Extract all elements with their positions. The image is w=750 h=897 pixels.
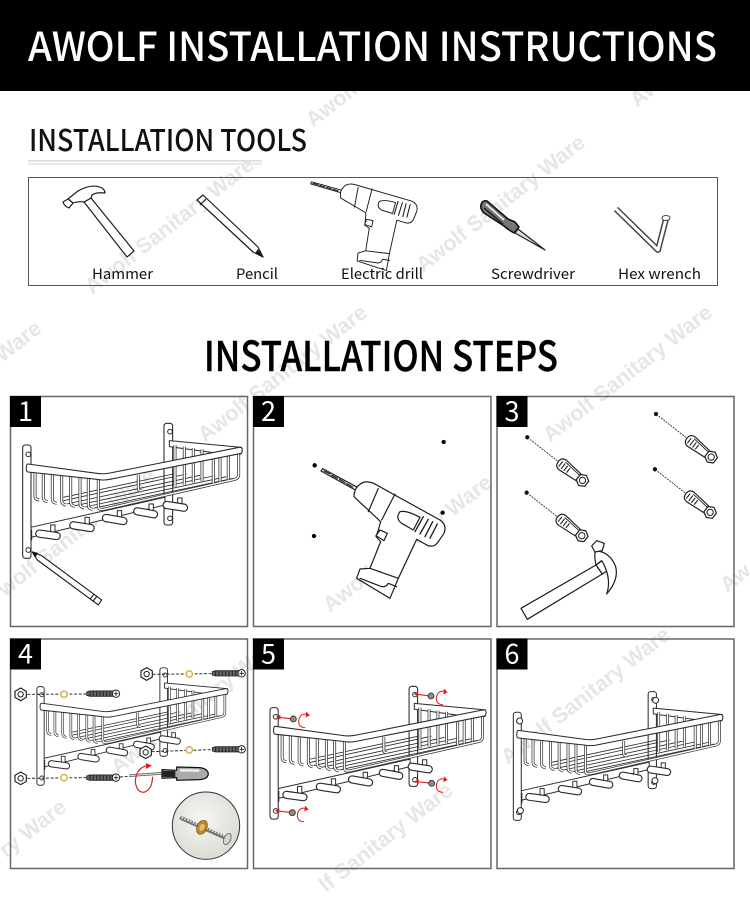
watermarks: Awolf Sanitary Ware xyxy=(80,151,259,299)
step number 4 xyxy=(10,632,41,672)
red tightening arrows and caps xyxy=(275,689,448,822)
watermarks: Awolf Sanitary Ware xyxy=(411,129,590,277)
panel: step 5 xyxy=(253,632,491,868)
panel: step 1 xyxy=(10,390,248,626)
panel: step 4 xyxy=(10,632,248,868)
pencil marking hole xyxy=(32,552,102,605)
wall anchors xyxy=(521,408,719,544)
step number 2 xyxy=(253,390,284,429)
panel: step 6 xyxy=(496,632,734,868)
step number 6: 6 xyxy=(504,632,520,672)
step number 3: 3 xyxy=(504,390,520,429)
mounted screw caps xyxy=(517,697,659,814)
hammer xyxy=(521,541,616,619)
tool: hex wrench xyxy=(616,209,701,284)
drill with marked holes xyxy=(312,440,446,598)
step number 2: 2 xyxy=(261,390,276,429)
tool: screwdriver xyxy=(481,201,575,284)
title banner xyxy=(0,0,750,91)
photo inset: screw with washer xyxy=(172,792,240,859)
watermarks: Awolf Sanitary Ware xyxy=(106,631,285,779)
tool: electric drill: Electric drill xyxy=(341,263,423,284)
step number 4: 4 xyxy=(18,632,33,672)
panel: step 3 xyxy=(496,390,734,626)
installed rack xyxy=(513,692,723,820)
step number 5 xyxy=(253,632,284,672)
panel: installation tools xyxy=(28,160,718,286)
tool: electric drill xyxy=(310,160,429,284)
tool: pencil xyxy=(197,195,278,284)
tool: hammer: Hammer xyxy=(92,263,153,284)
tool: screwdriver: Screwdriver xyxy=(491,263,575,284)
tool: hex wrench: Hex wrench xyxy=(618,263,701,284)
watermarks: Awolf Sanitary Ware xyxy=(496,621,675,769)
basket rack xyxy=(270,686,486,819)
watermarks: Awolf Sanitary Ware xyxy=(538,299,717,447)
basket rack xyxy=(23,423,242,558)
step number 1: 1 xyxy=(18,390,33,429)
step number 3 xyxy=(496,390,528,429)
title banner: AWOLF INSTALLATION INSTRUCTIONS xyxy=(28,15,717,73)
tool: pencil: Pencil xyxy=(236,263,278,284)
step number 1 xyxy=(10,390,41,429)
basket rack xyxy=(37,668,228,785)
heading: installation tools: INSTALLATION TOOLS xyxy=(29,116,307,160)
watermarks: lf Sanitary Ware xyxy=(314,777,457,897)
screws, washers and nuts xyxy=(15,668,245,785)
watermarks: Awolf Sanitary Ware xyxy=(318,469,497,617)
step number 5: 5 xyxy=(261,632,276,672)
screwdriver with rotation arrow xyxy=(129,763,208,792)
panel: step 2 xyxy=(253,390,491,626)
watermarks: Awolf Sanitary Ware xyxy=(193,299,372,447)
heading: installation steps: INSTALLATION STEPS xyxy=(204,323,558,383)
step number 6 xyxy=(496,632,528,672)
tool: hammer xyxy=(63,186,153,284)
watermarks: Awolf S xyxy=(301,64,378,132)
